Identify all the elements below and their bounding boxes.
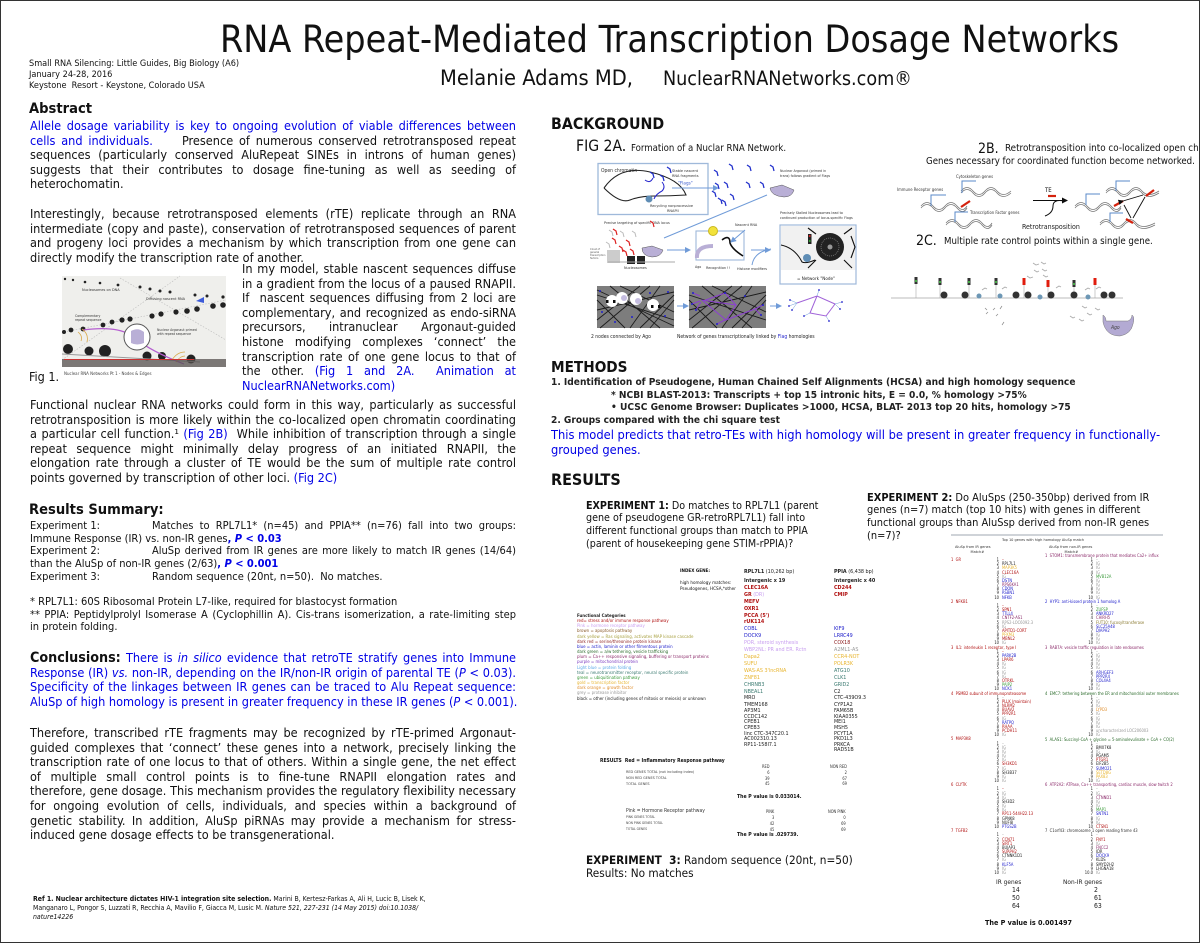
- reference: Ref 1. Nuclear architecture dictates HIV-1 integration site selection. Marini B, Kertesz-Farkas A, Ali H, Lucic B, Lisek K, Manganaro L, Pongor S, Luzzati R, Recchia A, Mavilio F, Giacca M, Lusic M. Nature 521, 227-231 (14 May 2015) doi:10.1038/ nature14226: [33, 895, 426, 921]
- experiment 2: summary counts: [996, 878, 1102, 910]
- text block: abstract intro: heterochomatin.: [30, 176, 124, 191]
- text block: conclusions: [30, 650, 517, 709]
- experiment 3: EXPERIMENT 3: Random sequence (20nt, n=50) Results: No matches: [586, 853, 853, 880]
- experiment 1: RPL7L1 gene list: Intergenic x 19 CLEC16A GR (DR) MEFV OXR1 PCCA (5') rUK114 COBL DOCK9 POR, steroid synthesis WBP2NL: PR and ER. Rctn Dapa2 SUFU WAS-AS 3'lncRNA ZNF81 CHRNB3 NBEAL1 MRO TMEM168: [744, 578, 806, 708]
- text block: abstract intro: suggests that their contributes to dosage fine-tuning as well as seeding of: [30, 162, 516, 177]
- author line: Melanie Adams MD, NuclearRNANetworks.com®: [440, 66, 912, 91]
- experiment 2: summary counts: 2 61 63: [1094, 886, 1102, 910]
- heading: results summary: Results Summary:: [29, 501, 164, 518]
- experiment 2: summary counts: Non-IR genes: [1063, 878, 1102, 886]
- figure 1 label: Fig 1.: [29, 369, 59, 384]
- text block: abstract intro: cells and individuals. Presence of numerous conserved retrotransposed repeat: [30, 133, 516, 148]
- experiment 1: PPIA gene list: Intergenic x 40 CD244 CMIP KIF9 LRRC49 COX18 A2ML1-AS CCR4-NOT POLR3K ATG10 CLK1 GRID2 C2 CTC-439O9.3 CYP1A2: [834, 578, 875, 708]
- heading: methods: METHODS: [551, 358, 628, 376]
- figure 2A heading: FIG 2A.: [576, 137, 626, 155]
- figure 2B: retrotransposition diagram: [897, 174, 1159, 231]
- experiment 1: results tables: PINK 3 42 45: [766, 809, 774, 832]
- methods prediction: This model predicts that retro-TEs with high homology will be present in greater frequency in functionally- grouped genes.: [551, 428, 1160, 458]
- figure 1: animation still: with repeat sequence: [157, 332, 191, 336]
- text block: footnotes: [30, 595, 516, 633]
- figure 1: animation still: Diffusing nascent RNA: [146, 296, 186, 301]
- text block: functional networks: elongation rate through a cluster of TE would be the sum of multiple rate control: [30, 455, 516, 470]
- experiment 1: results tables: PINK GENES TOTAL NON PINK GENES TOTAL TOTAL GENES: [626, 815, 663, 831]
- text block: abstract intro: sequences (particularly conserved AluRepeat SINEs in introns of human genes): [30, 147, 516, 162]
- heading: background: BACKGROUND: [551, 114, 664, 133]
- experiment 1: results tables: NON PINK 0 69 69: [828, 809, 846, 832]
- text block: abstract intro: [30, 118, 516, 191]
- figure 2B: retrotransposition diagram: TE: [1044, 187, 1052, 194]
- figure 1: animation still: Nuclear Argonaut primed: [157, 328, 197, 332]
- experiment 1: results tables: RED 6 39 45: [762, 764, 770, 786]
- experiment 1 question: EXPERIMENT 1: Do matches to RPL7L1 (parent gene of pseudogene GR-retroRPL7L1) fall into different functional groups than match to PPIA (parent of housekeeping gene STIM-rPPIA)?: [586, 498, 818, 550]
- figure 2B heading: Genes necessary for coordinated function become networked.: [926, 156, 1195, 167]
- figure 2A: formation of nuclear RNA network: factors: [590, 256, 599, 260]
- text block: footnotes: * RPL7L1: 60S Ribosomal Protein L7-like, required for blastocyst formation: [30, 595, 397, 608]
- experiment 1: results tables: NON RED 2 67 69: [830, 764, 847, 786]
- text block: model description: NuclearRNANetworks.com): [242, 378, 395, 393]
- figure 2A: formation of nuclear RNA network: Nuclear Argonaut (primed in: [780, 169, 826, 173]
- text block: conclusions: AluSp of high homology is present in greater frequency in these IR genes (P < 0.001).: [30, 694, 517, 709]
- figure 2A: formation of nuclear RNA network: Nucleosomes: [624, 265, 647, 270]
- text block: conclusions: Response (IR) vs. non-IR, depending on the IR/non-IR origin of parental TE (P < 0.03).: [30, 665, 516, 680]
- figure 2A: formation of nuclear RNA network: general: [590, 250, 600, 254]
- experiment 2: top 10 genes table: 1 GR 2 NFKB1 3 IL1: interleukin 1 receptor, type I 4 PSMB2 subunit of immunoproteasome 5 MAP3K8 6 CLYTK 7 TGFB2: [951, 557, 1026, 833]
- experiment 1: results tables: [600, 758, 847, 838]
- figure 2A: formation of nuclear RNA network: Recycling nonprocessive: [650, 203, 693, 208]
- figure 2A: formation of nuclear RNA network: Stable nascent: [672, 168, 699, 173]
- figure 2A heading: Formation of a Nuclar RNA Network.: [631, 143, 786, 154]
- experiment 1: PPIA gene list: FAM65B KIAA0355 MEI1 MSH5 PCYT1A PKD1L3 PRKCA RAD51B: [834, 708, 858, 753]
- text block: retrotransposed elements: Interestingly, because retrotransposed elements (rTE) replicate through an RNA: [30, 206, 516, 221]
- figure 2C heading: 2C.: [916, 233, 937, 249]
- text block: results summary: Random sequence (20nt, n=50). No matches.: [152, 570, 383, 583]
- experiment 1: RPL7L1 gene list: RPL7L1 (10,262 bp): [744, 569, 794, 575]
- text block: model description: [242, 261, 516, 393]
- text block: footnotes: ** PPIA: Peptidylprolyl Isomerase A (Cyclophillin A). Cis-trans isomerization, a rate-limiting step: [30, 608, 516, 621]
- figure 2A: formation of nuclear RNA network: "Flags": [678, 180, 693, 186]
- text block: retrotransposed elements: directly modify the transcription rate of another.: [30, 250, 304, 265]
- experiment 2: top 10 genes table: AluSp from non-IR genes Match#: [1049, 544, 1092, 554]
- text block: abstract intro: Allele dosage variability is key to ongoing evolution of viable differences between: [30, 118, 516, 133]
- experiment 2: top 10 genes table: Top 10 genes with high homology AluSp match: [1002, 537, 1084, 542]
- experiment 1: results tables: The P value is .029739.: [737, 832, 798, 838]
- figure 2A: formation of nuclear RNA network: Cloud of: [590, 247, 600, 251]
- text block: functional networks: Functional nuclear RNA networks could form in this way, particularly as successful: [30, 397, 516, 412]
- text block: results summary: Experiment 2:: [30, 544, 100, 557]
- text block: therefore: genetic stability. In addition, AluSp piRNAs may provide a mechanism for stress-: [30, 813, 516, 828]
- figure 2C: rate control diagram: Ago: [1110, 325, 1120, 331]
- text block: results summary: Experiment 3:: [30, 570, 100, 583]
- text block: functional networks: points governed by transcription of other loci. (Fig 2C): [30, 470, 337, 485]
- text block: results summary: than the AluSp of non-IR genes (2/63), P < 0.001: [30, 557, 278, 570]
- experiment 2: P value: The P value is 0.001497: [985, 918, 1072, 927]
- text block: model description: complementary, and recognized as endo-siRNA: [242, 305, 516, 320]
- figure 2C heading: [916, 233, 1153, 249]
- text block: methods: 1. Identification of Pseudogene, Human Chained Self Alignments (HCSA) and high homology sequence * NCBI BLAST-2013: Transcripts + top 15 intronic hits, E = 0.0, % homology >75% • UCSC Genome Browser: Duplicates >1000, HCSA, BLAT- 2013 top 20 hits, homology >75 2. Groups compared with the chi square test: [551, 377, 1075, 426]
- text block: functional networks: repeat sequence might minimally delay progress of an initiated RNAPII, the: [30, 441, 516, 456]
- figure 2A: formation of nuclear RNA network: Open chromatin: [601, 168, 637, 174]
- text block: model description: If nascent sequences diffusing from 2 loci are: [242, 290, 516, 305]
- text block: model description: histone modifying complexes ‘connect’ the: [242, 334, 516, 349]
- text block: therefore: for ongoing evolution of cells, individuals, and species within a background of: [30, 798, 516, 813]
- figure 2B heading: [926, 141, 1200, 167]
- figure 2B: retrotransposition diagram: Immune Receptor genes: [897, 187, 943, 192]
- text block: model description: the other. (Fig 1 and 2A. Animation at: [242, 363, 516, 378]
- figure 2A: formation of nuclear RNA network: Nascent RNA: [735, 222, 758, 227]
- figure 1: animation still: repeat sequence: [75, 318, 101, 322]
- text block: therefore: therefore, gene dosage. This mechanism provides the regulatory flexibility necessary: [30, 783, 516, 798]
- figure 2C heading: Multiple rate control points within a single gene.: [944, 236, 1153, 247]
- text block: conclusions: Specificity of the linkages between IR genes can be traced to Alu Repeat sequence:: [30, 679, 516, 694]
- experiment 2: top 10 genes table: [951, 534, 1179, 875]
- text block: therefore: Therefore, transcribed rTE fragments may be recognized by rTE-primed Argonaut-: [30, 725, 516, 740]
- text block: therefore: of multiple small control points is to fine-tune RNAPII elongation rates and: [30, 769, 516, 784]
- figure 1: animation still: Nucleosomes on DNA: [82, 287, 120, 292]
- experiment 2: top 10 genes table: – RPL7L1 MAP3K5 CLEC16A IG DSTN RPS6KA1 CDON RSBN1 NFKB – SPN1 TTLL4 CNTF2-AS1 RPS2-LOC6092.3 IG APITD1-CORT PFKM3 MBNL2 IG – PARK2B LPAR6 IG IG IG IG OTRKL PAIP2 NCK1 – PLLK (maintain) NLRM2 BUAV2 PPP2R1 IG RATPQ RHAA PCDH11 IG – IG IG IG IG SH3KD1 IG SH3B37 IG IG – IG IG SH3D2 IG IG RP11-544H22.13 GPNK8 NUFI8 PTGS2B – CCN71 SIRT1 BUJAP3 SUAPH2 CTNNK1D1 IG KLF5A IG IG: [1002, 557, 1033, 875]
- experiment 2: top 10 genes table: 1 2 3 4 5 6 7 8 9 10 1 2 3 4 5 6 7 8 9 10 1 2 3 4 5 6 7 8 9 10 1 2 3 4 5 6 7 8 9 10 1 2 3 4 5 6 7 8 9 10 1 2 3 4 5 6 7 8 9 10 1 2 3 4 5 6 7 8 9 10.0: [1085, 557, 1093, 875]
- conference details: Small RNA Silencing: Little Guides, Big Biology (A6) January 24-28, 2016 Keystone Resort - Keystone, Colorado USA: [29, 59, 239, 91]
- heading: abstract: Abstract: [29, 100, 92, 117]
- text block: results summary: Matches to RPL7L1* (n=45) and PPIA** (n=76) fall into two groups:: [152, 519, 516, 532]
- experiment 1: index genes: INDEX GENE: high homology matches: Pseudogenes, HCSA,*other: [680, 569, 736, 592]
- text block: model description: transcription rate of one gene locus to that of: [242, 349, 516, 364]
- figure 2A: formation of nuclear RNA network: Precise targeting of specific DNA locus: [604, 220, 670, 225]
- figure 2A: formation of nuclear RNA network: Ago: [695, 265, 701, 269]
- figure 2A: formation of nuclear RNA network: Network of genes transcriptionally linked by Flag homologies: [677, 334, 815, 340]
- experiment 1: results tables: RED GENES TOTAL (not including index) NON RED GENES TOTAL TOTAL GENES: [626, 769, 694, 786]
- experiment 1: results tables: RESULTS Red = Inflammatory Response pathway: [600, 758, 725, 764]
- figure 2A: formation of nuclear RNA network: = Network "Node": [797, 276, 835, 282]
- text block: functional networks: retrotransposition is more likely within the co-localized open chromatin coordinating: [30, 412, 516, 427]
- experiment 1: PPIA gene list: PPIA (6,438 bp): [834, 569, 874, 575]
- experiment 2: top 10 genes table: 1 STOM1: transmembrane protein that mediates Ca2+ influx 2 HYP1: anti-kissed protein 1 homolog A 3 RAB7A: vesicle traffic regulation in late endosomes 4 EMC7: tethering between the ER and mitochondrial outer membranes 5 ALAS1: Succinyl-CoA + glycine = 5-aminolevulinate + CoA + CO(2) 6 ATP2A2: ATPase, Ca++ transporting, cardiac muscle, slow twitch 2 7 C1orf43: chromosome 1 open reading frame 43: [1045, 553, 1179, 833]
- figure 1: animation still: Complementary: [75, 314, 100, 318]
- text block: results summary: Immune Response (IR) vs. non-IR genes, P < 0.03: [30, 532, 282, 545]
- experiment 1: results tables: Pink = Hormone Receptor pathway: [626, 808, 705, 814]
- figure 2A: formation of nuclear RNA network: Histone modifiers: [737, 266, 767, 271]
- figure 2A: formation of nuclear RNA network: trans) follows gradient of Flags: [780, 174, 830, 178]
- figure 2A: formation of nuclear RNA network: [590, 164, 856, 340]
- text block: retrotransposed elements: and progeny loci provides a mechanism by which transcription from one gene can: [30, 235, 516, 250]
- experiment 2: top 10 genes table: AluSp from IR genes Match#: [955, 544, 991, 554]
- text block: functional networks: [30, 397, 516, 485]
- experiment 2: top 10 genes table: 1 2 3 4 5 6 7 8 9 10 1 2 3 4 5 6 7 8 9 10 1 2 3 4 5 6 7 8 9 10 1 2 3 4 5 6 7 8 9 10 1 2 3 4 5 6 7 8 9 10 1 2 3 4 5 6 7 8 9 10 1 2 3 4 5 6 7 8 9 10: [994, 557, 999, 875]
- experiment 2 question: EXPERIMENT 2: Do AluSps (250-350bp) derived from IR genes (n=7) match (top 10 hits) with genes in different functional groups than AluSsp derived from non-IR genes (n=7)?: [867, 490, 1149, 542]
- figure 2B heading: 2B.: [978, 141, 999, 157]
- figure 2A: formation of nuclear RNA network: continued production of locus-specific Flags: [780, 216, 853, 220]
- experiment 1: functional categories legend: Functional Categories red= stress and/or immune response pathway Pink = hormone receptor pathway brown = apoptosis pathway dark yellow = Ras signaling, activates MAP kinase cascade dark red = serine/threonine protein kinase blue = actin, laminin or other filmentous protein dark green = a/w tethering, vesicle trafficking plum = Ca++ responsive signaling, buffering or transport proteins purple = mitochondrial protein Light blue = protein folding teal = neurotransmitter receptor, neural specific protein green = ubiquitination pathway gold = transcription factor dark orange = growth factor grey = protease inhibitor black = other (including genes of mitosis or meiosis) or unknown: [577, 614, 709, 702]
- text block: conclusions: Conclusions: There is in silico evidence that retroTE stratify genes into Immune: [30, 650, 516, 666]
- text block: model description: precursors, intranuclear Argonaut-guided: [242, 319, 516, 334]
- text block: retrotransposed elements: intermediate (copy and paste), conservation of retrotransposed sequences of parent: [30, 221, 516, 236]
- text block: footnotes: in protein folding.: [30, 620, 117, 633]
- figure 2A: formation of nuclear RNA network: transcription: [590, 253, 606, 257]
- figure 2A: formation of nuclear RNA network: RNAPII: [667, 208, 679, 213]
- figure 2B: retrotransposition diagram: Cytoskeleton genes: [956, 174, 993, 179]
- figure 2A: formation of nuclear RNA network: Recognition !!: [706, 265, 730, 270]
- figure 2C: rate control diagram: [891, 262, 1134, 336]
- figure 2A heading: [576, 137, 786, 155]
- text block: model description: In my model, stable nascent sequences diffuse: [242, 261, 516, 276]
- text block: results summary: Experiment 1:: [30, 519, 100, 532]
- figure 2A: formation of nuclear RNA network: RNA fragments: [672, 173, 699, 178]
- text block: therefore: [30, 725, 516, 842]
- heading: results: RESULTS: [551, 470, 621, 489]
- text block: therefore: guided complexes that ‘connect’ these genes into a network, precisely linking the: [30, 740, 516, 755]
- experiment 1: RPL7L1 gene list: AP3M1 CCDC142 CPEB1 CPEB3 linc CTC-347C20.1 AC002310.13 RP11-158I7.1: [744, 708, 789, 748]
- figure 2A: formation of nuclear RNA network: Precisely Stalled Nucleosomes lead to: [780, 211, 843, 215]
- text block: results summary: AluSp derived from IR genes are more likely to match IR genes (14/64): [152, 544, 516, 557]
- figure 1: animation still: [62, 276, 226, 367]
- title: RNA Repeat-Mediated Transcription Dosage Networks: [220, 17, 1119, 61]
- figure 1 caption: Nuclear RNA Networks Pt 1 - Nodes & Edges: [64, 371, 152, 377]
- text block: functional networks: a particular cell function.¹ (Fig 2B) While inhibition of transcription through a single: [30, 426, 516, 441]
- experiment 2: summary counts: 14 50 64: [1012, 886, 1020, 910]
- text block: retrotransposed elements: [30, 206, 516, 265]
- figure 2A: formation of nuclear RNA network: 2 nodes connected by Ago: [591, 334, 651, 340]
- text block: model description: in a gradient from the locus of a paused RNAPII.: [242, 276, 516, 291]
- figure 2B: retrotransposition diagram: Retrotransposition: [1022, 223, 1080, 231]
- text block: therefore: induced gene dosage effects to be transgenerational.: [30, 827, 334, 842]
- experiment 2: summary counts: IR genes: [996, 878, 1021, 886]
- figure 2B: retrotransposition diagram: Transcription Factor genes: [969, 210, 1019, 215]
- text block: therefore: transcription rate of one locus to that of others. Within a single gene, the net effect: [30, 754, 516, 769]
- text block: results summary: [30, 519, 516, 583]
- experiment 1: results tables: The P value is 0.033014.: [737, 794, 802, 800]
- experiment 2: top 10 genes table: – IG IG IG MVB12A IG IG IG IG IG – ZUFSP ANKRD27 CHIRH5 FUT10: fucosyltransferase SLC25A48 DIAPH2 IG IG IG – IG IG IG IG ARHGEF3 PPP2R4 COL4A4 IG IG – IG IG LYPD3 IG IG IG IG uncharacterized LOC206003 IG – BMX7K8 IG PGAM5 PTGR1 EIF2B5 SUMO21 SETD8G PAX83 IG – IG CTNND1 IG IG MAP1 SNTN1 IG IG CTSN1 – FNY1 IG FNCC2 IDR DOCK9 KLDS SMYD2H2 LHGNA18 IG: [1096, 557, 1148, 875]
